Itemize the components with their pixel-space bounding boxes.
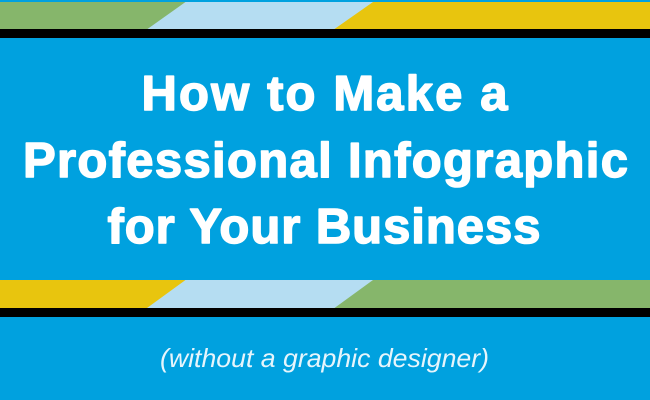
subtitle: (without a graphic designer) xyxy=(160,343,489,373)
title xyxy=(23,67,628,254)
bottom stripe band xyxy=(0,280,650,317)
title: Professional Infographic xyxy=(23,134,628,188)
title: for Your Business xyxy=(108,200,540,254)
top stripe band xyxy=(0,2,650,38)
title: How to Make a xyxy=(142,67,508,121)
